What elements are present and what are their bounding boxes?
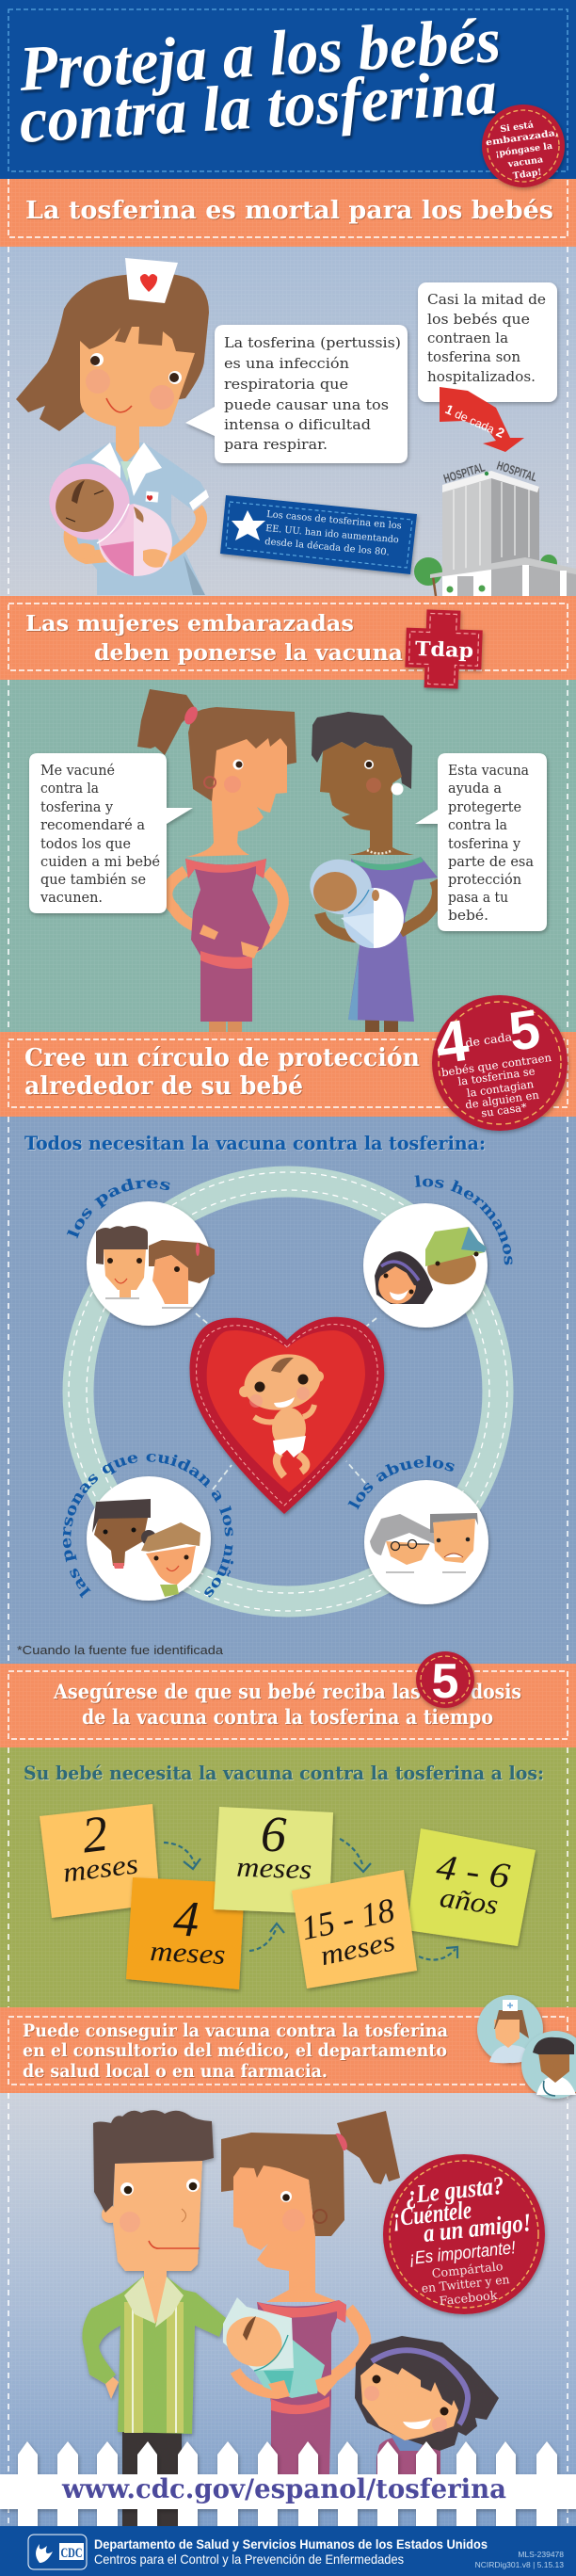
text: dónde vacunarse: en el consultorio del médico, el departamento (23, 2040, 447, 2061)
speech bubble: me vacuné: que también se (40, 871, 146, 888)
icon: doctor medallion (521, 2031, 576, 2099)
footer (0, 2526, 576, 2576)
speech bubble: hospitalized: contraen la (427, 330, 508, 346)
heart with baby (190, 1317, 384, 1514)
badge: 4 de cada 5: bebés que contraen (440, 1051, 552, 1079)
illustration: girl (355, 2336, 499, 2474)
text: dónde vacunarse (23, 2021, 448, 2082)
title: contra la tosferina (17, 56, 499, 156)
title: Proteja a los bebés (16, 4, 503, 105)
text: dónde vacunarse: Puede conseguir la vacuna contra la tosferina (23, 2021, 448, 2041)
badge: le gusta: ¡Es importante! (408, 2238, 517, 2269)
heading: embarazadas: Las mujeres embarazadas (25, 611, 354, 636)
badge: 4 de cada 5 (431, 995, 568, 1131)
ring of protection (69, 1172, 507, 1611)
speech bubble: me vacuné: todos los que (40, 835, 131, 852)
panel: circle of protection section (0, 1117, 576, 1664)
speech bubble: nurse: para respirar. (224, 436, 328, 453)
illustration: hospital: HOSPITAL (441, 459, 487, 486)
illustration: mother (221, 2111, 400, 2474)
panel: second orange band (0, 596, 576, 689)
illustration: baby (239, 1347, 326, 1476)
text: dónde vacunarse: de salud local o en una farmacia. (23, 2061, 328, 2082)
panel: nurse section (0, 247, 576, 596)
footnote: *Cuando la fuente fue identificada (17, 1644, 223, 1657)
badge: si está embarazada: ¡póngase la (494, 141, 553, 159)
note: 4 meses (126, 1877, 245, 1989)
callout: cases rising: EE. UU. han ido aumentando (265, 523, 399, 545)
footer text: code: MLS-239478 (518, 2550, 564, 2559)
label: los abuelos: los abuelos (348, 1456, 455, 1510)
speech bubble: me vacuné: cuiden a mi bebé (40, 853, 160, 870)
logo: CDC (28, 2535, 87, 2569)
title (16, 4, 503, 156)
illustration: father (82, 2110, 226, 2526)
heading: mortal: La tosferina es mortal para los bebés (25, 197, 553, 225)
footer text: code (475, 2550, 564, 2569)
heading: cinco dosis: dosis (471, 1680, 521, 1703)
panel: fourth orange band (0, 1651, 576, 1747)
speech bubble: nurse: La tosferina (pertussis) (224, 334, 401, 351)
badge: si está embarazada (482, 105, 565, 187)
speech bubble: me vacuné: vacunen. (40, 889, 103, 906)
badge: le gusta: ¡Cuéntele (392, 2196, 472, 2231)
speech bubble: esta vacuna: parte de esa (448, 853, 534, 870)
speech bubble: nurse: es una infección (224, 355, 349, 372)
callout: cases rising: desde la década de los 80. (264, 537, 390, 558)
speech bubble: esta vacuna: bebé. (448, 907, 488, 924)
speech bubble: hospitalized: tosferina son (427, 348, 520, 365)
panel: title header (0, 0, 576, 179)
note: 2 meses: meses (61, 1848, 140, 1889)
badge: 4 de cada 5: la tosferina se (457, 1064, 536, 1088)
note: 6 meses: meses (236, 1852, 312, 1885)
illustration: baby in blanket (219, 2297, 337, 2399)
panel: first orange band (0, 179, 576, 247)
callout: cases rising (220, 495, 417, 574)
illustration: nurse with baby (16, 258, 209, 595)
panel: pregnant women section (0, 680, 576, 1032)
connecting dashes (196, 1313, 376, 1489)
speech bubble: esta vacuna: Esta vacuna (448, 762, 529, 779)
footer text: centers: Centros para el Control y la Prevención de Enfermedades (94, 2552, 404, 2567)
icon: nurse medallion (477, 1995, 543, 2063)
circle: siblings (363, 1203, 488, 1328)
badge: le gusta: ¿Le gusta? (404, 2171, 505, 2209)
speech bubble: me vacuné: tosferina y (40, 798, 113, 815)
badge: le gusta: a un amigo! (422, 2208, 533, 2247)
speech bubble: nurse: intensa o dificultad (224, 416, 371, 433)
arrows between notes (164, 1839, 457, 1960)
footer text: code: NCIRDig301.v8 | 5.15.13 (475, 2560, 564, 2569)
heading: embarazadas (25, 611, 403, 666)
badge: si está embarazada: embarazada, (485, 128, 559, 148)
note: 2 meses (40, 1804, 160, 1918)
heading: círculo de protección: Cree un círculo de protección (24, 1044, 420, 1072)
note: 15 - 18 meses (292, 1870, 417, 1988)
badge: le gusta: Compártalo (431, 2259, 504, 2280)
speech bubble: nurse (185, 325, 408, 463)
label: los padres: los padres (66, 1179, 170, 1239)
heading: embarazadas: deben ponerse la vacuna (94, 640, 403, 666)
note: 4 - 6 años: años (438, 1882, 500, 1921)
note: 4 meses: meses (150, 1936, 226, 1971)
circle: grandparents (364, 1480, 488, 1604)
icon: Tdap cross (405, 609, 483, 689)
speech bubble: nurse: respiratoria que (224, 376, 348, 393)
badge: le gusta (383, 2154, 545, 2314)
badge: le gusta: Facebook (439, 2288, 499, 2308)
heading: círculo de protección (24, 1044, 420, 1101)
subheading: todos necesitan: Todos necesitan la vacuna contra la tosferina: (24, 1132, 486, 1154)
note: 6 meses: 6 (260, 1806, 287, 1862)
subheading: su bebé necesita: Su bebé necesita la vacuna contra la tosferina a los: (24, 1762, 544, 1784)
footer text: department: Departamento de Salud y Servicios Humanos de los Estados Unidos (94, 2536, 488, 2552)
website url: www.cdc.gov/espanol/tosferina (61, 2473, 506, 2504)
label: las personas que cuidan a los niños: las personas que cuidan a los niños (62, 1454, 233, 1599)
note: 4 - 6 años: 4 - 6 (434, 1847, 512, 1896)
badge: 4 de cada 5: 4 (431, 1008, 473, 1077)
speech bubble: esta vacuna: tosferina y (448, 835, 520, 852)
speech bubble: me vacuné: contra la (40, 780, 99, 797)
badge: 5 (416, 1651, 474, 1709)
badge: 4 de cada 5: de cada (464, 1030, 513, 1050)
speech bubble: esta vacuna (415, 753, 547, 931)
circle: caregivers (87, 1476, 211, 1601)
note: 15 - 18 meses: meses (317, 1925, 398, 1972)
badge: 4 de cada 5: la contagian (466, 1077, 536, 1100)
speech bubble: esta vacuna: protección (448, 871, 521, 888)
note: 15 - 18 meses: 15 - 18 (297, 1891, 398, 1947)
label: los hermanos: los hermanos (414, 1175, 512, 1265)
illustration: pregnant woman (137, 689, 296, 1032)
speech bubble: me vacuné: recomendaré a (40, 816, 145, 833)
heading: cinco dosis (53, 1680, 521, 1729)
speech bubble: me vacuné: Me vacuné (40, 762, 115, 779)
speech bubble: hospitalized: los bebés que (427, 311, 530, 328)
panel: third orange band (0, 1032, 576, 1117)
illustration: hospital: HOSPITAL (495, 459, 539, 484)
illustration: hospital (414, 459, 576, 596)
badge: 4 de cada 5: 5 (505, 998, 544, 1063)
arrow: 1 de cada 2: 1 de cada 2 (443, 401, 507, 441)
panel: schedule section (0, 1747, 576, 2007)
icon: Tdap cross: Tdap (415, 636, 473, 662)
note: 2 meses: 2 (79, 1805, 111, 1864)
speech bubble: me vacuné (29, 753, 193, 913)
logo: CDC: CDC (60, 2546, 83, 2561)
callout: cases rising: Los casos de tosferina en los (266, 509, 402, 532)
speech bubble: esta vacuna: ayuda a (448, 780, 502, 797)
badge: si está embarazada: Tdap! (512, 168, 542, 182)
heading: círculo de protección: alrededor de su bebé (24, 1072, 303, 1101)
heading: cinco dosis: Asegúrese de que su bebé reciba las (53, 1680, 421, 1703)
circle: parents (87, 1201, 215, 1326)
speech bubble: esta vacuna: protegerte (448, 798, 521, 815)
speech bubble: hospitalized: hospitalizados. (427, 368, 536, 385)
speech bubble: nurse: puede causar una tos (224, 396, 389, 413)
speech bubble: esta vacuna: pasa a tu (448, 889, 508, 906)
badge: si está embarazada: vacuna (506, 154, 544, 170)
note: 4 - 6 años (407, 1828, 536, 1946)
badge: le gusta: en Twitter y en (421, 2272, 510, 2295)
panel: family section (0, 2093, 576, 2526)
heading: cinco dosis: de la vacuna contra la tosferina a tiempo (82, 1705, 493, 1729)
illustration: mother with baby (304, 712, 438, 1032)
note: 4 meses: 4 (172, 1890, 200, 1948)
badge: 5: 5 (432, 1654, 458, 1709)
speech bubble: hospitalized: Casi la mitad de (427, 291, 546, 308)
white picket fence (0, 2441, 576, 2526)
arrow: 1 de cada 2 (440, 387, 524, 452)
badge: 4 de cada 5: su casa* (480, 1101, 528, 1119)
badge: 4 de cada 5: de alguien en (464, 1088, 540, 1111)
speech bubble: hospitalized (418, 282, 557, 402)
speech bubble: esta vacuna: contra la (448, 816, 507, 833)
badge: si está embarazada: Si está (500, 120, 535, 135)
panel: fifth orange band (0, 1995, 576, 2099)
note: 6 meses (214, 1806, 333, 1914)
